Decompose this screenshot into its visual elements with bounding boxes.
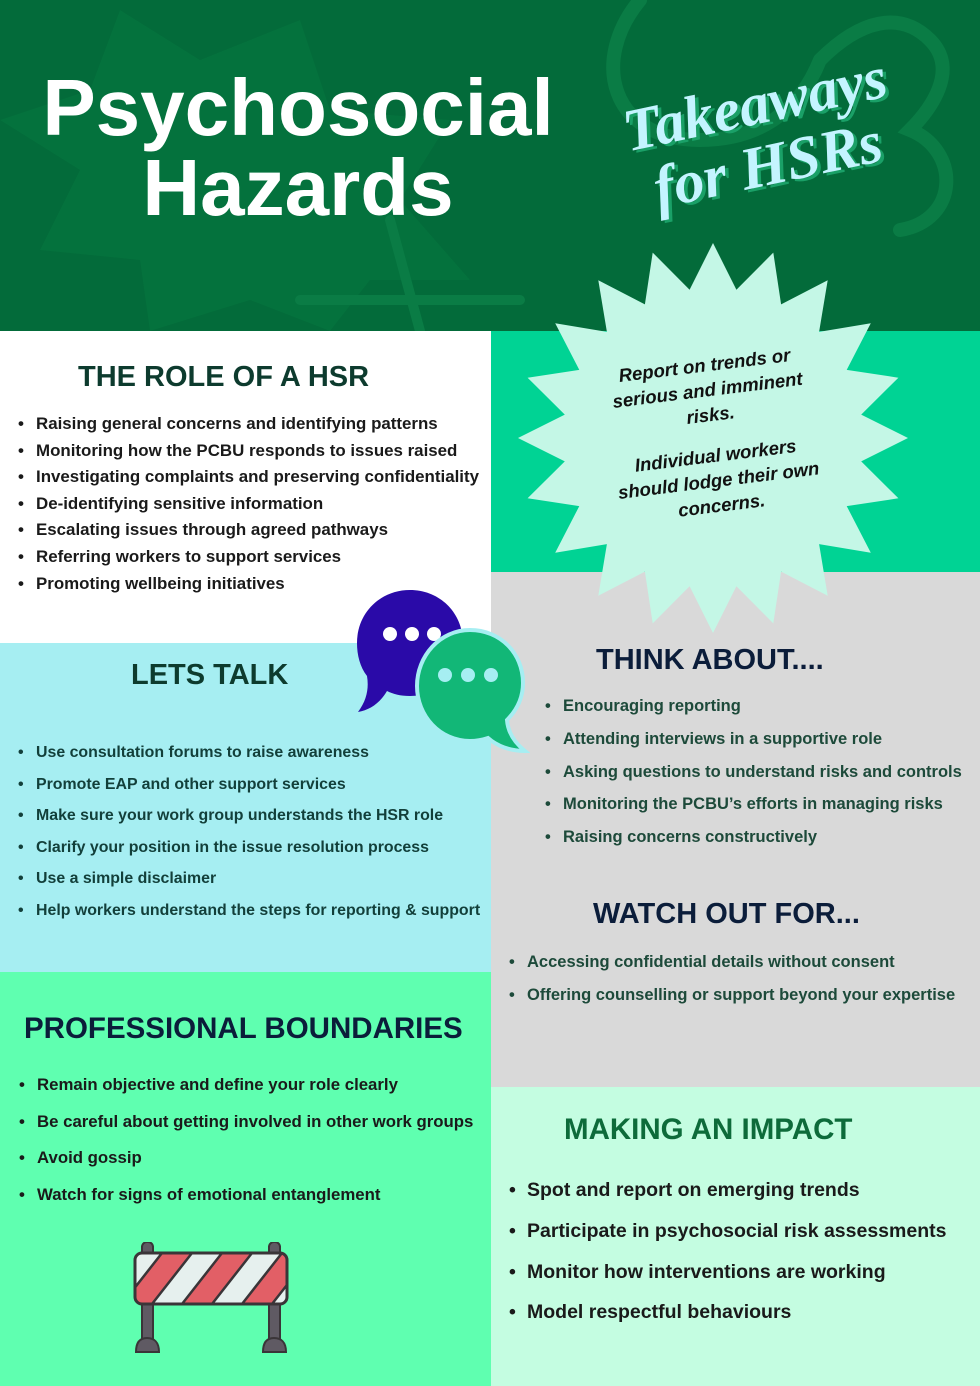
impact list: Spot and report on emerging trends [527, 1179, 860, 1201]
role list: Referring workers to support services [36, 547, 341, 566]
header background [0, 0, 980, 331]
boundaries list: Remain objective and define your role clearly [37, 1075, 398, 1094]
icon: chat bubbles [357, 590, 530, 753]
lets talk list [18, 744, 480, 919]
starburst callout [518, 243, 908, 632]
think about list: Monitoring the PCBU’s efforts in managing risks [563, 795, 943, 813]
lets talk list: Clarify your position in the issue resolution process [36, 839, 429, 856]
lets talk list: Use a simple disclaimer [36, 870, 216, 887]
role list: Promoting wellbeing initiatives [36, 574, 285, 593]
starburst text: concerns. [677, 489, 766, 521]
heading: lets talk: LETS TALK [131, 659, 288, 691]
subtitle: Takeaways for HSRs: for HSRs [647, 108, 888, 221]
impact list: Monitor how interventions are working [527, 1261, 886, 1283]
title: Hazards [142, 143, 454, 232]
heading: professional boundaries: PROFESSIONAL BOUNDARIES [24, 1012, 463, 1045]
role list [18, 414, 479, 593]
role list: Raising general concerns and identifying patterns [36, 414, 438, 433]
panel: think about / watch out [491, 572, 980, 1087]
starburst text: should lodge their own [617, 457, 820, 503]
icon: road barrier [134, 1242, 288, 1353]
title: Psychosocial [42, 63, 554, 152]
lets talk list: Use consultation forums to raise awareness [36, 744, 369, 761]
subtitle: Takeaways for HSRs [617, 44, 893, 223]
think about list [546, 697, 962, 846]
panel: making an impact [491, 1087, 980, 1386]
title [42, 63, 554, 232]
starburst text [611, 344, 820, 521]
starburst text: risks. Individual workers [634, 401, 797, 476]
boundaries list: Be careful about getting involved in other work groups [37, 1112, 473, 1130]
lets talk list: Promote EAP and other support services [36, 776, 346, 793]
subtitle: Takeaways for HSRs: Takeaways [617, 44, 893, 164]
impact list [510, 1179, 946, 1323]
panel: green behind starburst [491, 331, 980, 572]
watch out list: Offering counselling or support beyond your expertise [527, 986, 955, 1004]
boundaries list: Avoid gossip [37, 1148, 142, 1167]
heading: think about: THINK ABOUT.... [596, 644, 824, 676]
impact list: Participate in psychosocial risk assessments [527, 1220, 946, 1242]
starburst text: serious and imminent [611, 368, 804, 412]
impact list: Model respectful behaviours [527, 1301, 791, 1323]
think about list: Encouraging reporting [563, 697, 741, 715]
heading: the role: THE ROLE OF A HSR [78, 361, 369, 393]
lets talk list: Make sure your work group understands the HSR role [36, 807, 443, 824]
role list: De-identifying sensitive information [36, 494, 323, 513]
lets talk list: Help workers understand the steps for reporting & support [36, 902, 480, 919]
boundaries list: Watch for signs of emotional entanglement [37, 1184, 380, 1204]
watch out list: Accessing confidential details without consent [527, 953, 895, 971]
heading: watch out for: WATCH OUT FOR... [593, 898, 860, 930]
role list: Escalating issues through agreed pathways [36, 520, 388, 539]
role list: Investigating complaints and preserving confidentiality [36, 467, 479, 486]
think about list: Raising concerns constructively [563, 828, 817, 846]
panel: professional boundaries [0, 972, 491, 1386]
panel: role of a HSR [0, 331, 491, 643]
watch out list [510, 953, 955, 1004]
think about list: Asking questions to understand risks and controls [563, 763, 962, 781]
think about list: Attending interviews in a supportive role [563, 730, 882, 748]
heading: making an impact: MAKING AN IMPACT [564, 1113, 852, 1146]
role list: Monitoring how the PCBU responds to issues raised [36, 441, 457, 460]
panel: lets talk [0, 643, 491, 972]
boundaries list [20, 1075, 473, 1204]
starburst text: Report on trends or [617, 344, 791, 386]
